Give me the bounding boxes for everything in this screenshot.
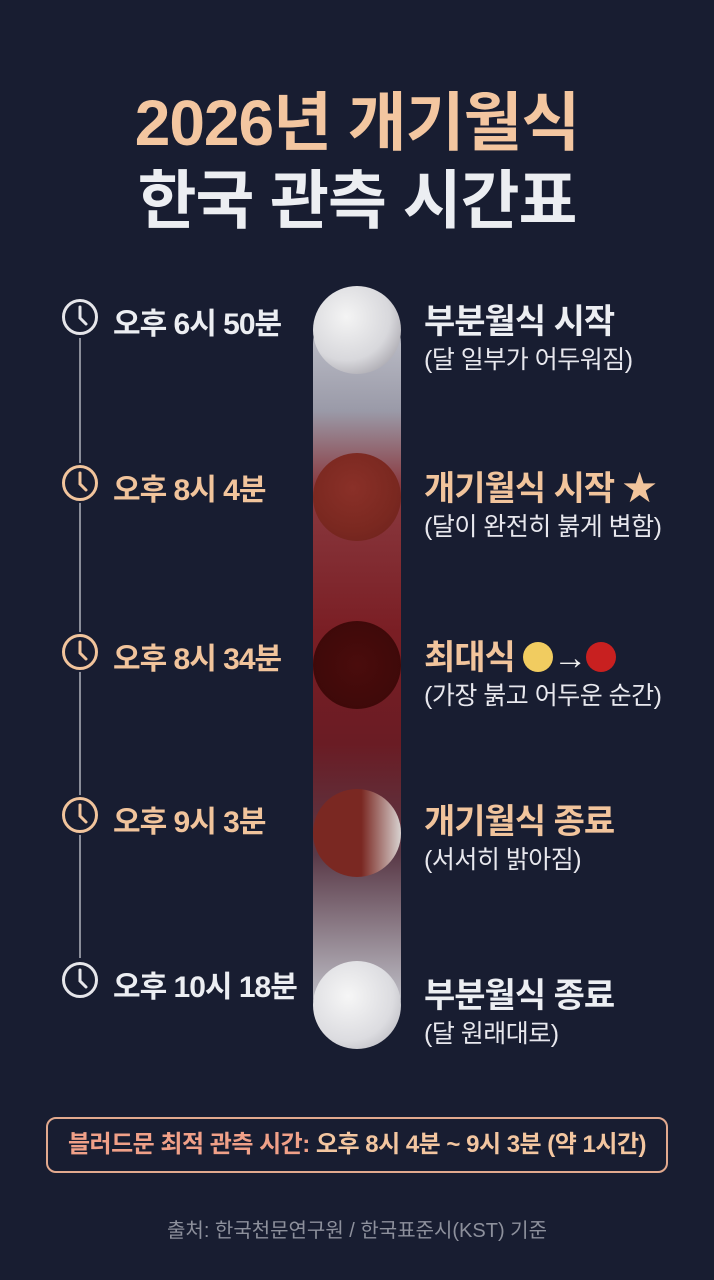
label 2 [424,470,662,541]
moon 3 [313,621,401,709]
time 4 [62,795,266,839]
label 3 [424,639,662,710]
time 4: 오후 9시 3분 [113,806,265,839]
label 5 [424,977,614,1048]
moon 1 [313,286,401,374]
time 2 [62,463,266,507]
label 4: (서서히 밝아짐) [424,846,581,874]
label 2: 개기월식 시작 ★ [424,470,656,508]
title: 2026년 개기월식 [135,87,579,159]
time 1: 오후 6시 50분 [113,308,281,341]
label 1: 부분월식 시작 [424,303,614,341]
label 1: (달 일부가 어두워짐) [424,346,633,374]
title [135,87,579,237]
label 3: (가장 붉고 어두운 순간) [424,682,662,710]
timeline line [79,338,81,958]
label 5: 부분월식 종료 [424,977,614,1015]
label 2: (달이 완전히 붉게 변함) [424,513,662,541]
moon 2 [313,453,401,541]
label 4: 개기월식 종료 [424,803,614,841]
callout box: 블러드문 최적 관측 시간: 오후 8시 4분 ~ 9시 3분 (약 1시간) [68,1131,646,1158]
time 5: 오후 10시 18분 [113,971,297,1004]
moon 5 [313,961,401,1049]
time 3: 오후 8시 34분 [113,643,281,676]
time 5 [62,962,297,1004]
time 1 [62,299,281,341]
central column [313,300,401,1040]
time 3 [62,632,281,676]
footer source: 출처: 한국천문연구원 / 한국표준시(KST) 기준 [167,1220,547,1242]
title: 한국 관측 시간표 [138,165,576,237]
label 4 [424,803,614,874]
label 3: 최대식 → [424,639,586,677]
label 1 [424,303,633,374]
time 2: 오후 8시 4분 [113,474,265,507]
moon 4 [313,789,401,877]
callout box [46,1117,668,1173]
label 5: (달 원래대로) [424,1020,559,1048]
